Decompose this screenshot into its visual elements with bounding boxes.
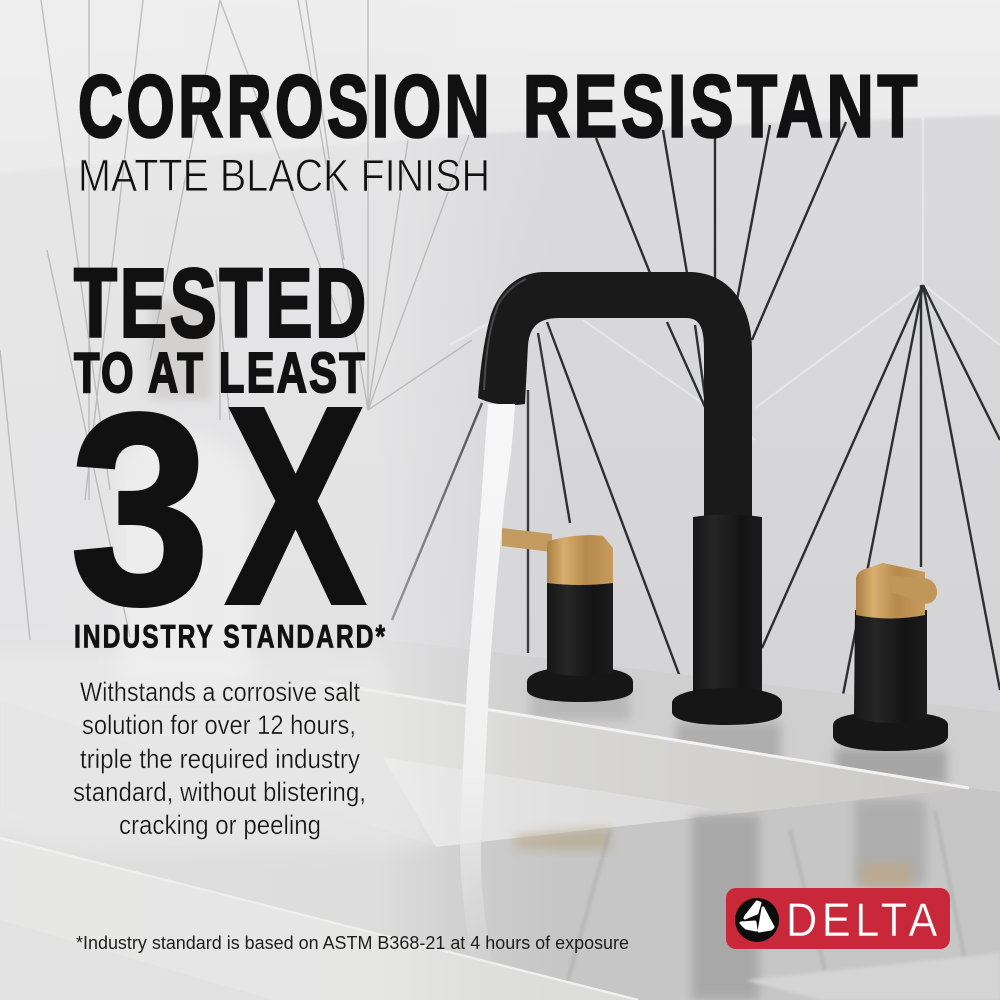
body text block: triple the required industry — [80, 744, 360, 774]
headline: industry standard: INDUSTRY STANDARD* — [74, 618, 387, 654]
big number: 3X: 3 — [70, 357, 210, 661]
spout and neck — [478, 272, 752, 525]
centre base plate — [672, 688, 782, 725]
right handle body — [854, 610, 927, 723]
headline: to at least: TO AT LEAST — [74, 341, 367, 405]
body text block: Withstands a corrosive salt — [80, 677, 360, 707]
subtitle: MATTE BLACK FINISH — [78, 150, 490, 201]
body text block: standard, without blistering, — [73, 777, 366, 807]
big number: 3X — [70, 348, 367, 663]
left gold cap — [547, 535, 613, 585]
right handle — [833, 563, 948, 751]
title — [78, 56, 921, 156]
faucet — [478, 272, 948, 751]
headline: tested: TESTED — [74, 248, 369, 358]
right gold cap — [856, 563, 925, 618]
black fan lines on the wall — [392, 122, 1000, 700]
countertop — [0, 640, 1000, 1000]
body text block: cracking or peeling — [119, 810, 321, 840]
water stream — [460, 404, 515, 1000]
left handle body — [547, 578, 613, 676]
body text block — [73, 677, 366, 840]
Delta logo — [726, 888, 950, 949]
pale basin surface on the left — [0, 650, 436, 850]
front lip of the counter — [0, 838, 638, 1000]
right handle base — [833, 712, 948, 751]
sink basin — [383, 757, 740, 847]
blurred reflection shapes behind the text — [0, 0, 472, 690]
big number: 3X: X — [225, 348, 367, 663]
logo wordmark: DELTA — [786, 893, 942, 946]
right gold lever — [888, 575, 937, 604]
faint mirrored tile lines — [565, 810, 965, 990]
title: CORROSION — [78, 56, 493, 156]
counter reflections — [530, 680, 947, 786]
riser body — [693, 514, 762, 692]
footnote: *Industry standard is based on ASTM B368-21 at 4 hours of exposure — [76, 933, 629, 953]
left handle — [502, 528, 633, 702]
left handle base — [527, 667, 633, 702]
front counter surface — [0, 700, 1000, 1000]
wall tile seams — [450, 118, 1000, 440]
logo mark — [735, 898, 779, 942]
left gold lever — [502, 528, 552, 552]
stone slab edge — [319, 682, 969, 813]
body text block: solution for over 12 hours, — [82, 710, 356, 740]
